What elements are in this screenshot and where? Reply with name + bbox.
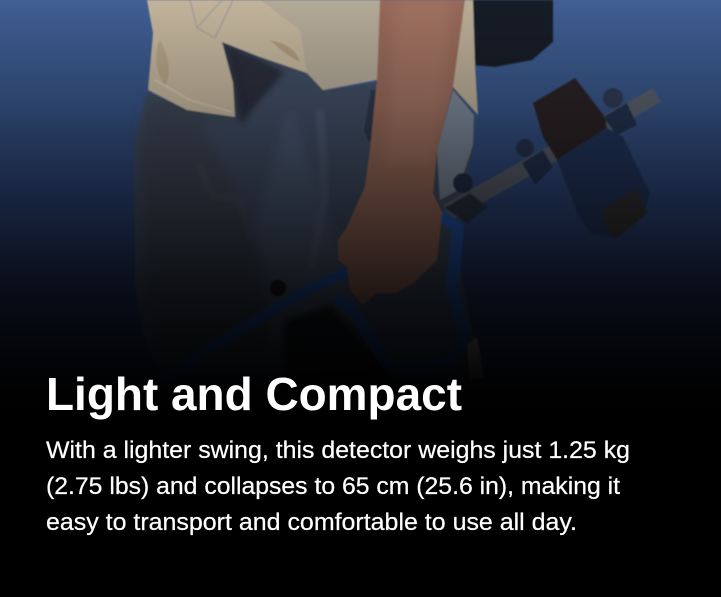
title: Light and Compact — [46, 368, 462, 420]
detector shaft and control head — [443, 78, 661, 238]
dark lower bag shape — [283, 305, 395, 385]
detector handle frame — [160, 215, 466, 382]
lower light strap piece — [467, 337, 484, 380]
photo: person holding detector — [134, 0, 661, 385]
trousers — [134, 42, 483, 385]
description text: (2.75 lbs) and collapses to 65 cm (25.6 in), making it — [46, 473, 620, 500]
shirt — [147, 0, 478, 117]
backpack — [465, 0, 553, 67]
description text — [46, 437, 630, 536]
description text: easy to transport and comfortable to use all day. — [46, 509, 577, 536]
description text: With a lighter swing, this detector weighs just 1.25 kg — [46, 437, 630, 464]
handle knob ring — [269, 279, 287, 297]
arm highlight — [385, 0, 450, 165]
arm and hand — [338, 0, 465, 305]
